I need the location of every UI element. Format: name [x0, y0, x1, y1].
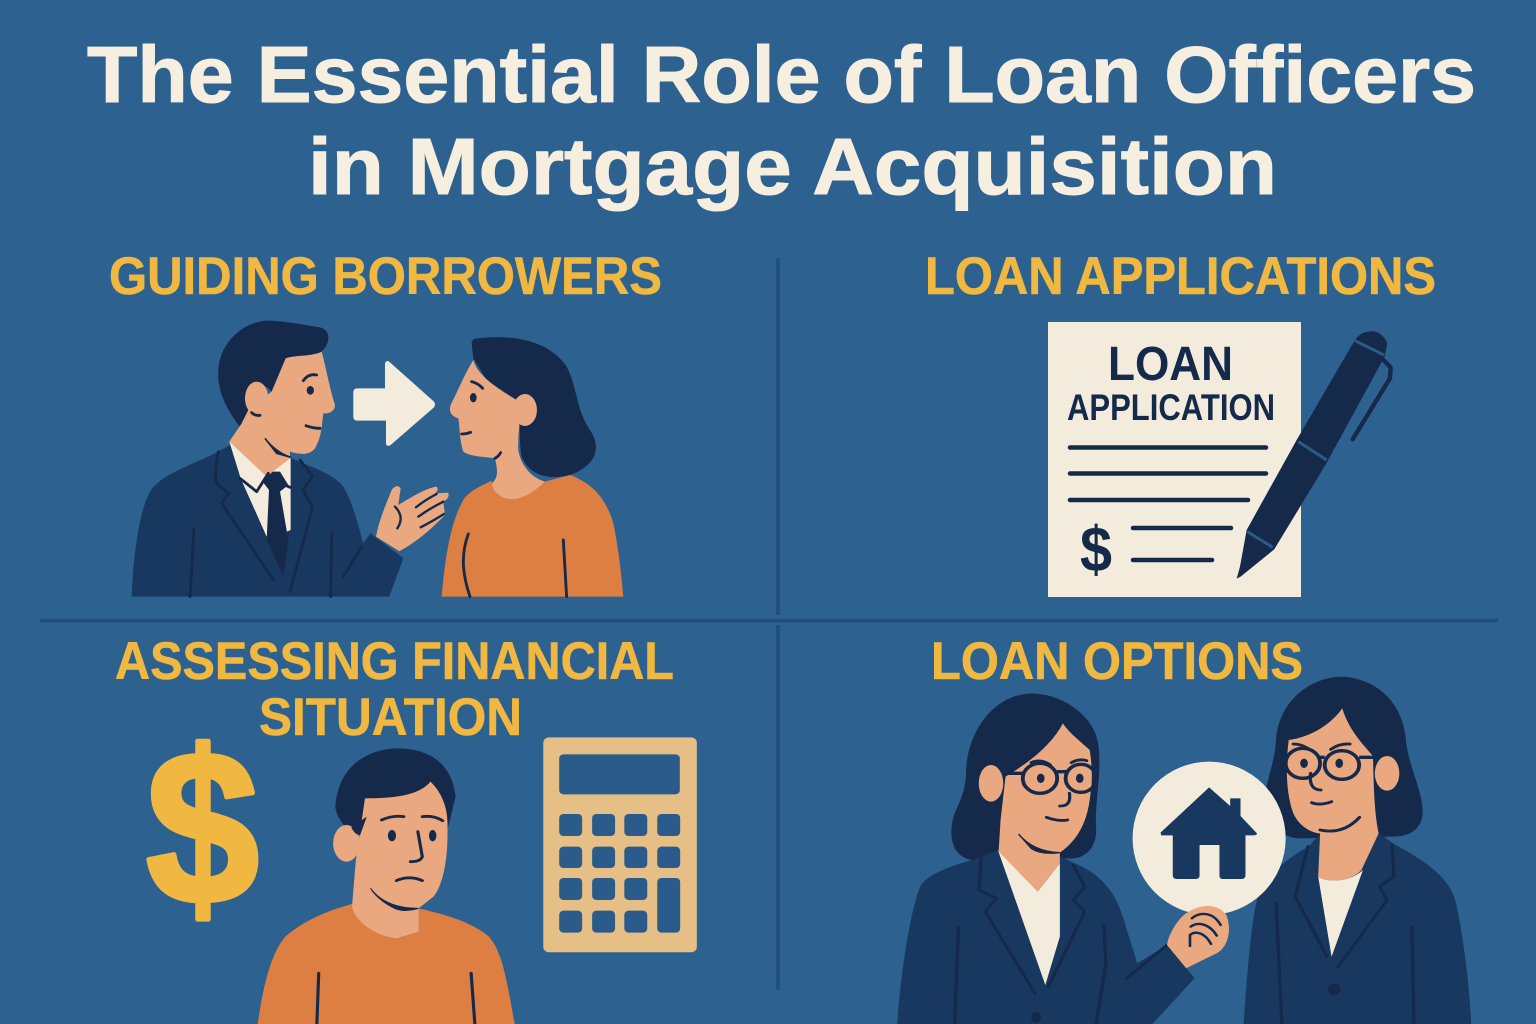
panel: loan options	[897, 632, 1471, 1024]
document: loan application form: $	[1080, 513, 1112, 585]
icon: calculator	[543, 737, 697, 952]
document: loan application form	[1048, 322, 1301, 597]
panel: guiding borrowers	[109, 247, 662, 597]
illustration: second advisor on right	[1244, 677, 1471, 1024]
illustration: advisor with glasses on left	[897, 693, 1195, 1024]
document: loan application form: APPLICATION	[1067, 387, 1275, 428]
title: in Mortgage Acquisition	[308, 122, 1277, 211]
illustration: loan officer in suit	[132, 321, 449, 597]
document: loan application form: LOAN	[1108, 338, 1233, 391]
icon: hand holding circle	[1167, 906, 1229, 968]
heading: loan applications: LOAN APPLICATIONS	[925, 247, 1436, 306]
title	[87, 30, 1476, 211]
panel: assessing financial situation	[115, 632, 697, 1024]
heading: assessing financial situation: ASSESSING FINANCIAL	[115, 632, 674, 691]
icon: pen	[1237, 331, 1391, 579]
title: The Essential Role of Loan Officers	[87, 30, 1476, 119]
heading: assessing financial situation: SITUATION	[259, 688, 522, 747]
illustration: worried borrower	[258, 748, 515, 1024]
icon: dollar sign: $	[146, 707, 259, 950]
icon: house in circle	[1133, 762, 1286, 915]
arrow: guidance direction	[353, 361, 435, 446]
illustration: borrower woman	[442, 337, 623, 597]
heading: assessing financial situation	[115, 632, 674, 747]
panel: loan applications	[925, 247, 1436, 597]
heading: loan options: LOAN OPTIONS	[931, 632, 1303, 691]
heading: guiding borrowers: GUIDING BORROWERS	[109, 247, 662, 306]
